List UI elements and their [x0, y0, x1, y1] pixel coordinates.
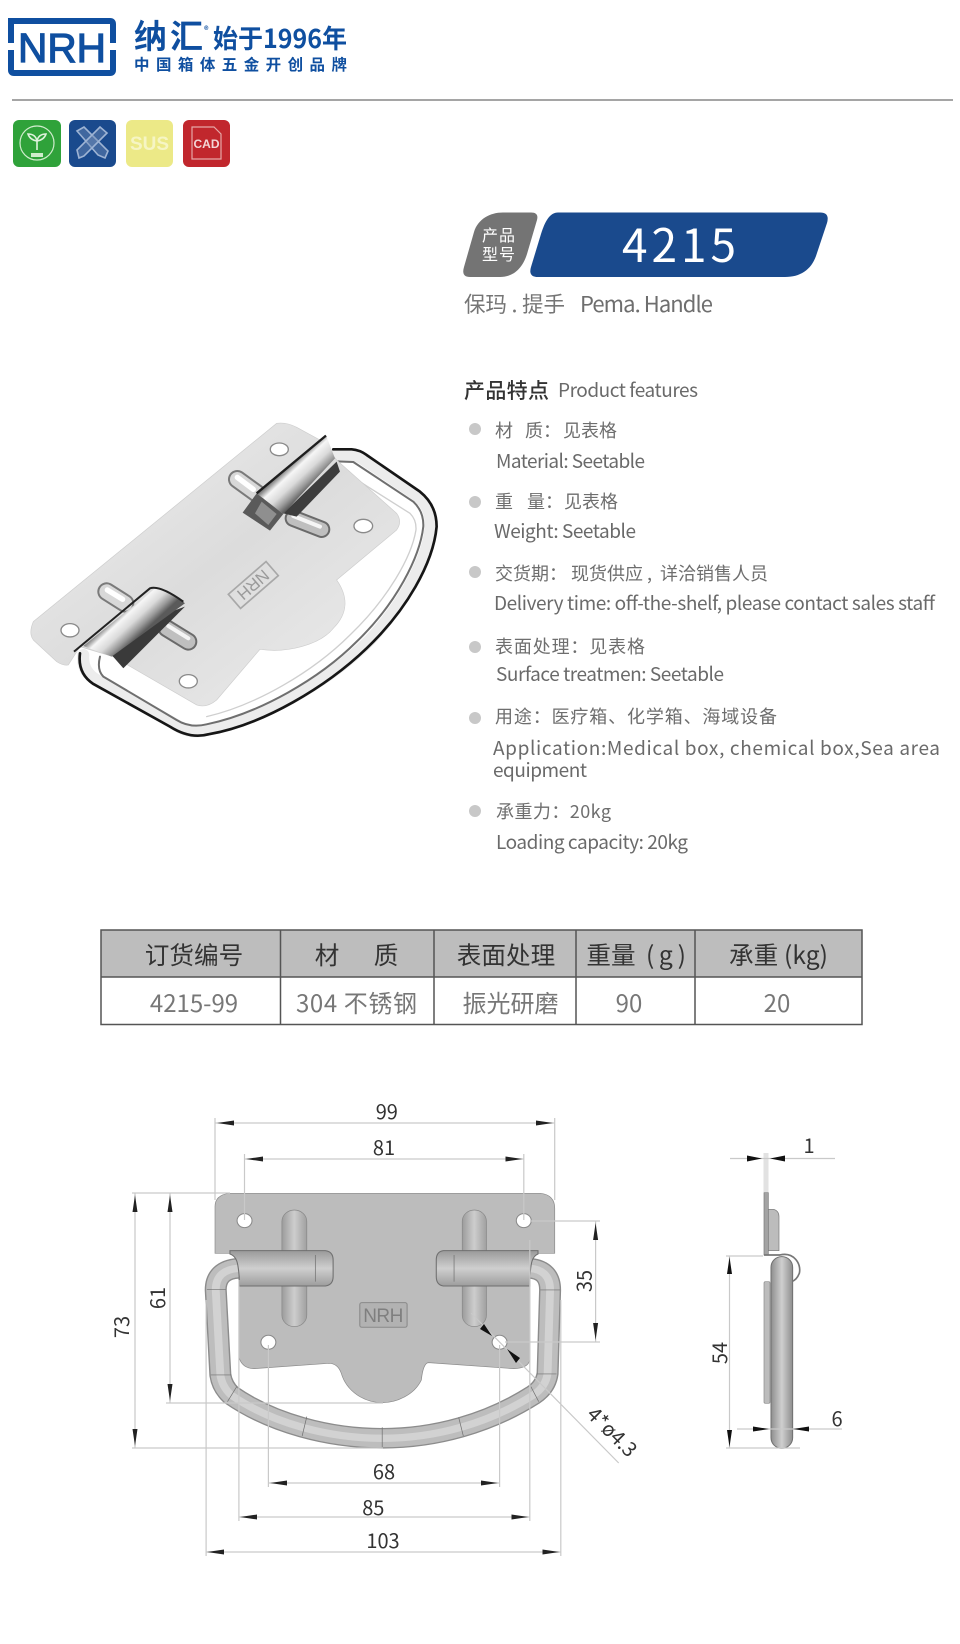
dimension labels: 85 — [362, 1492, 384, 1521]
feature: material: 材 — [495, 417, 513, 443]
feature: weight: 重 — [495, 488, 513, 514]
icon: SUS badge — [126, 120, 173, 167]
NRH emboss: NRH — [233, 566, 273, 604]
technical drawing: side view — [704, 1130, 843, 1448]
spec table: 90 — [616, 984, 642, 1019]
header: brand slogan — [134, 10, 347, 75]
feature: weight: 见表格 — [564, 488, 618, 514]
plate — [31, 423, 400, 706]
technical drawing: front view: NRH — [363, 1306, 403, 1327]
icon: tools badge — [69, 120, 116, 167]
spec table: (g) — [646, 936, 686, 972]
icon: CAD badge — [183, 120, 230, 167]
model badge: label — [463, 212, 537, 277]
side view labels: 6 — [831, 1403, 843, 1432]
feature: material: 见表格 — [563, 417, 617, 443]
spec table: 重量 — [586, 936, 636, 972]
feature: delivery time: 现货供应 , — [571, 560, 656, 586]
feature: material: 质： — [525, 417, 561, 443]
technical drawing: front view — [106, 1096, 645, 1556]
handle ring — [80, 449, 437, 736]
dimension labels: 73 — [106, 1316, 135, 1338]
dimension labels — [106, 1096, 645, 1554]
spec table: 承重 (kg) — [729, 936, 828, 972]
spec table: 表面处理 — [457, 936, 555, 972]
spec table: 304 不锈钢 — [296, 984, 417, 1019]
dimension labels: 35 — [568, 1270, 598, 1292]
icon: SUS badge: SUS — [130, 134, 169, 155]
holes — [61, 443, 373, 688]
side view labels: 1 — [803, 1130, 815, 1159]
features heading: 产品特点 — [464, 375, 549, 405]
header divider — [12, 99, 953, 101]
icon: eco badge — [13, 120, 61, 167]
spec table: 4215-99 — [150, 984, 238, 1019]
dimension labels: 4*ø4.3 — [581, 1399, 645, 1463]
product photo: pema handle — [31, 423, 437, 736]
NRH emboss — [228, 561, 278, 608]
feature: weight: Weight: Seetable — [494, 517, 636, 544]
feature: application — [469, 703, 940, 783]
feature: loading capacity — [469, 798, 688, 855]
spec table — [101, 930, 862, 1024]
feature: delivery time: Delivery time: off-the-shelf, please contact sales staff — [494, 589, 936, 616]
features heading: Product features — [558, 376, 698, 403]
feature: delivery time: 交货期： — [495, 560, 567, 586]
dimension labels: 81 — [373, 1132, 395, 1161]
feature: application: 用途：医疗箱、化学箱、海域设备 — [495, 703, 777, 729]
dimension labels: 68 — [373, 1456, 395, 1485]
feature: delivery time — [469, 560, 936, 616]
feature: application: equipment — [493, 756, 587, 783]
brackets — [230, 1251, 333, 1286]
spec table: 质 — [374, 936, 398, 972]
dimension lines — [132, 1118, 619, 1556]
dimension labels: 103 — [366, 1525, 400, 1554]
feature: loading capacity: Loading capacity: 20kg — [496, 828, 688, 855]
feature: delivery time: 详洽销售人员 — [660, 560, 768, 586]
feature: surface treatment: 表面处理：见表格 — [495, 633, 645, 659]
feature: weight: 量： — [527, 488, 563, 514]
side view labels: 54 — [704, 1342, 733, 1364]
handle — [207, 1268, 560, 1448]
product name: Pema. Handle — [580, 287, 713, 319]
icon: CAD badge: CAD — [194, 137, 220, 151]
holes — [237, 1214, 531, 1349]
upper bracket — [237, 477, 322, 529]
spec table: 振光研磨 — [462, 984, 558, 1019]
feature: loading capacity: 承重力：20kg — [496, 798, 611, 824]
plate — [215, 1193, 555, 1403]
spec table: 订货编号 — [145, 936, 243, 972]
feature: material — [469, 417, 645, 474]
lower bracket — [107, 590, 188, 642]
product name — [464, 287, 713, 319]
header: brand slogan: ® — [204, 23, 209, 36]
dimension labels: 61 — [142, 1287, 171, 1309]
feature: surface treatment — [469, 633, 724, 687]
side view labels — [704, 1130, 843, 1432]
slots — [282, 1210, 307, 1327]
feature: material: Material: Seetable — [496, 447, 645, 474]
model badge: number — [530, 210, 828, 277]
spec table: 材 — [315, 936, 339, 972]
feature: surface treatment: Surface treatmen: Seetable — [496, 660, 724, 687]
model badge: label: 型号 — [482, 241, 515, 265]
header: brand slogan: 始于1996年 — [213, 19, 347, 56]
feature: application: Application:Medical box, chemical box,Sea area — [493, 734, 940, 761]
spec table: 20 — [764, 984, 790, 1019]
header: brand logo: NRH — [18, 25, 106, 71]
dimension labels: 99 — [376, 1096, 398, 1125]
header: brand slogan: 纳汇 — [134, 10, 203, 58]
product name: 保玛 . 提手 — [464, 288, 565, 319]
model badge: number: 4215 — [622, 210, 736, 276]
features heading — [464, 375, 698, 405]
feature: weight — [469, 488, 636, 544]
header: brand slogan: 中国箱体五金开创品牌 — [134, 53, 347, 75]
model badge: label: 产品 — [482, 222, 515, 246]
